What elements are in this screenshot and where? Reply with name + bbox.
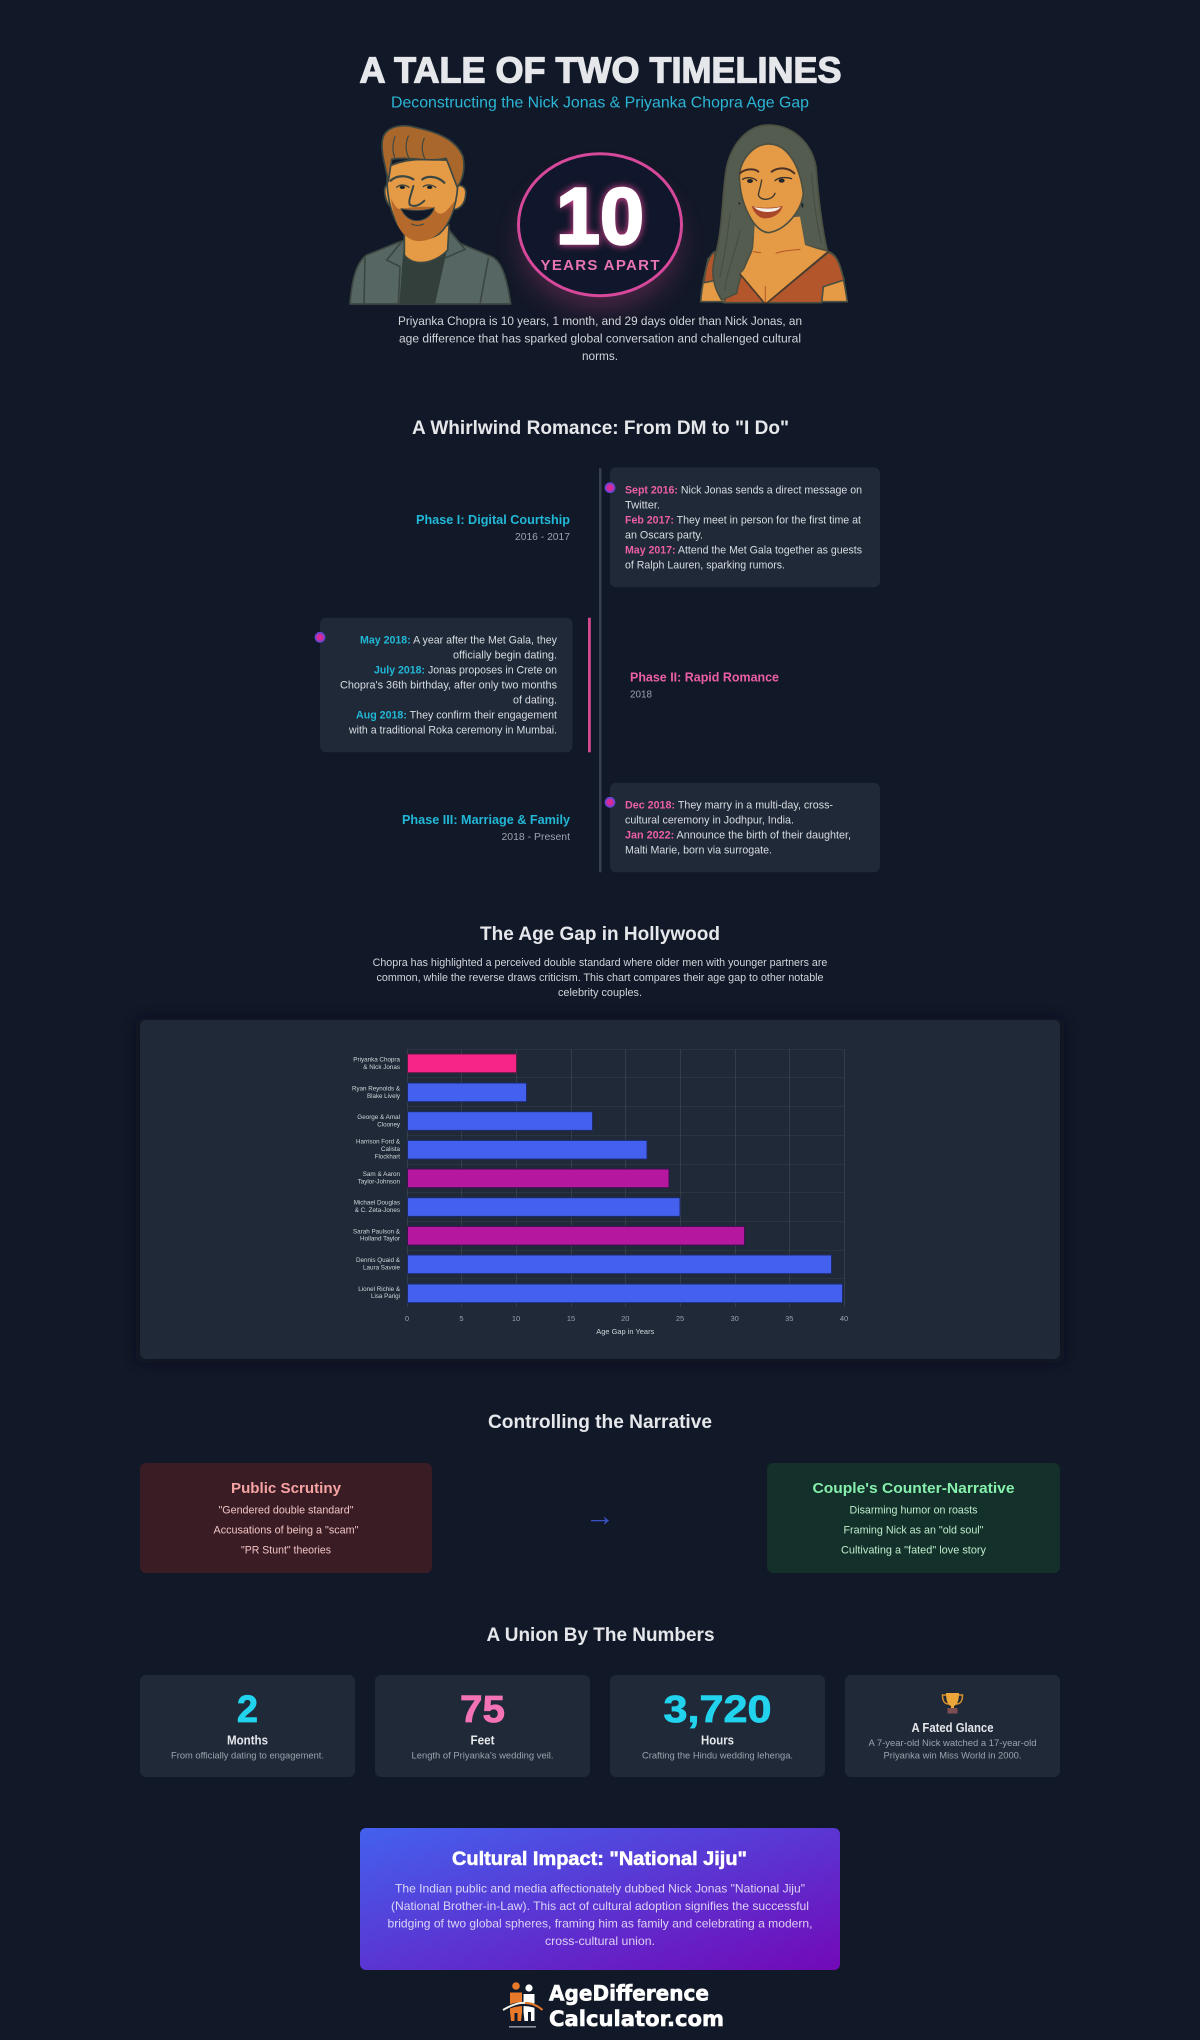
panel: public scrutiny <box>140 1463 432 1573</box>
chart axis ticks: 35 <box>785 1314 793 1323</box>
stat card: feet <box>375 1675 590 1777</box>
phase I label <box>416 512 570 543</box>
timeline spine <box>599 468 602 872</box>
panel: public scrutiny: "Gendered double standard" <box>218 1504 354 1516</box>
chart category labels: Harrison Ford & <box>356 1139 400 1146</box>
phase I card: Sept 2016: Nick Jonas sends a direct message on <box>625 485 862 497</box>
phase I card: May 2017: Attend the Met Gala together as guests <box>625 545 862 557</box>
chart category labels: Taylor-Johnson <box>358 1178 400 1185</box>
phase II card: Chopra's 36th birthday, after only two months <box>340 680 557 692</box>
phase II card: May 2018: A year after the Met Gala, they <box>360 635 557 647</box>
years apart label: YEARS APART <box>540 257 660 274</box>
stat card: fated glance: Priyanka win Miss World in 2000. <box>884 1751 1022 1761</box>
panel: public scrutiny: "PR Stunt" theories <box>241 1544 331 1556</box>
phase III label: Phase III: Marriage & Family <box>402 812 571 827</box>
chart category labels: Michael Douglas <box>354 1200 401 1207</box>
phase II card: officially begin dating. <box>453 650 557 662</box>
chart category labels: Calista <box>381 1146 400 1153</box>
chart axis ticks: 25 <box>676 1314 684 1323</box>
phase II card: July 2018: Jonas proposes in Crete on <box>374 665 557 677</box>
age gap badge <box>518 154 682 308</box>
panel: counter narrative: Couple's Counter-Narrative <box>812 1481 1014 1497</box>
panel: cultural impact: bridging of two global spheres, framing him as family and celebrating a modern, <box>388 1916 812 1930</box>
phase III card: Jan 2022: Announce the birth of their daughter, <box>625 830 851 842</box>
chart axis ticks: 15 <box>567 1314 575 1323</box>
panel: counter narrative <box>767 1463 1060 1573</box>
subtitle: Deconstructing the Nick Jonas & Priyanka Chopra Age Gap <box>391 94 809 111</box>
stat card: fated glance: A Fated Glance <box>912 1721 994 1735</box>
logo: Calculator.com <box>549 2007 724 2031</box>
chart category labels: Lionel Richie & <box>358 1286 401 1293</box>
stat card: hours <box>610 1675 825 1777</box>
timeline dot <box>316 633 324 642</box>
phase II label: 2018 <box>630 689 652 701</box>
phase III label <box>402 812 571 843</box>
chart axis title: Age Gap in Years <box>596 1327 655 1336</box>
phase III card: cultural ceremony in Jodhpur, India. <box>625 815 794 827</box>
chart category labels: Clooney <box>377 1122 401 1128</box>
logo <box>503 1982 724 2031</box>
chart axis ticks: 0 <box>405 1314 409 1323</box>
heading: narrative: Controlling the Narrative <box>488 1411 712 1433</box>
phase II card: with a traditional Roka ceremony in Mumbai. <box>348 725 557 737</box>
chart category labels: & Nick Jonas <box>363 1064 401 1071</box>
stat card: months: Months <box>227 1734 268 1748</box>
chart category labels: Laura Savoie <box>363 1264 400 1271</box>
panel: public scrutiny: Accusations of being a "scam" <box>214 1524 359 1536</box>
phase I card: an Oscars party. <box>625 530 703 542</box>
intro paragraph: Priyanka Chopra is 10 years, 1 month, and 29 days older than Nick Jonas, an <box>398 314 802 328</box>
phase II label: Phase II: Rapid Romance <box>630 670 779 685</box>
phase I card <box>606 467 880 587</box>
stat card: months: From officially dating to engagement. <box>171 1751 324 1761</box>
heading: age gap: The Age Gap in Hollywood <box>480 923 720 945</box>
phase III label: 2018 - Present <box>502 831 570 843</box>
stat card: hours: 3,720 <box>664 1689 772 1731</box>
chart category labels: & C. Zeta-Jones <box>355 1207 401 1214</box>
panel: cultural impact: The Indian public and media affectionately dubbed Nick Jonas "National Jiju" <box>395 1881 805 1895</box>
chart category labels: Sam & Aaron <box>363 1171 400 1178</box>
intro paragraph <box>398 314 802 363</box>
phase II card: of dating. <box>513 695 557 707</box>
stat card: fated glance: A 7-year-old Nick watched a 17-year-old <box>868 1738 1036 1748</box>
icon: two figures <box>503 1982 542 2028</box>
chart axis ticks: 30 <box>731 1314 739 1323</box>
panel: public scrutiny: Public Scrutiny <box>231 1481 341 1497</box>
chart category labels: Priyanka Chopra <box>353 1057 400 1064</box>
heading: numbers: A Union By The Numbers <box>486 1624 715 1646</box>
phase I card: Feb 2017: They meet in person for the first time at <box>625 515 862 527</box>
title: A TALE OF TWO TIMELINES <box>360 49 842 90</box>
phase I label: 2016 - 2017 <box>515 531 570 543</box>
panel: counter narrative: Cultivating a "fated" love story <box>841 1544 986 1556</box>
panel: cultural impact: (National Brother-in-Law). This act of cultural adoption signifies the successful <box>391 1899 809 1913</box>
chart axis ticks: 5 <box>459 1314 464 1323</box>
chart category labels: George & Amal <box>357 1114 400 1121</box>
chart axis ticks: 40 <box>840 1314 848 1323</box>
bar chart grid <box>407 1049 844 1307</box>
stat card: months: 2 <box>237 1689 258 1731</box>
illustration: Priyanka Chopra <box>701 125 847 303</box>
logo: AgeDifference <box>549 1982 709 2006</box>
chart bars <box>408 1054 842 1303</box>
intro paragraph: norms. <box>582 349 618 363</box>
timeline dot <box>606 798 614 807</box>
chart category labels: Dennis Quaid & <box>356 1257 401 1264</box>
chart axis ticks: 10 <box>512 1314 520 1323</box>
stat card: feet: Feet <box>470 1734 495 1748</box>
chart intro paragraph: common, while the reverse draws criticism. This chart compares their age gap to other notable <box>376 972 824 984</box>
phase I label: Phase I: Digital Courtship <box>416 512 570 527</box>
phase II label <box>630 670 779 701</box>
chart category labels: Holland Taylor <box>360 1236 401 1243</box>
panel: counter narrative: Framing Nick as an "old soul" <box>844 1524 984 1536</box>
timeline dot <box>606 483 614 492</box>
panel: counter narrative: Disarming humor on roasts <box>850 1504 978 1516</box>
chart category labels: Lisa Parigi <box>371 1293 400 1300</box>
phase III card: Dec 2018: They marry in a multi-day, cross- <box>625 800 833 812</box>
chart axis ticks: 20 <box>621 1314 629 1323</box>
phase III card: Malti Marie, born via surrogate. <box>625 845 772 857</box>
big number 10: 10 <box>556 171 644 260</box>
phase II card <box>316 618 591 752</box>
chart category labels <box>352 1057 401 1300</box>
phase I card: of Ralph Lauren, sparking rumors. <box>625 560 785 572</box>
stat card: feet: Length of Priyanka's wedding veil. <box>412 1751 554 1761</box>
phase II card: Aug 2018: They confirm their engagement <box>356 710 558 722</box>
chart intro paragraph: Chopra has highlighted a perceived double standard where older men with younger partners are <box>373 957 827 969</box>
stat card: feet: 75 <box>460 1689 505 1731</box>
panel: bar chart card <box>136 1018 1064 1363</box>
panel: cultural impact <box>360 1828 840 1970</box>
chart category labels: Sarah Paulson & <box>353 1228 400 1235</box>
chart axis ticks <box>405 1314 848 1323</box>
heading: timeline: A Whirlwind Romance: From DM to "I Do" <box>412 417 789 439</box>
panel: cultural impact: Cultural Impact: "National Jiju" <box>452 1849 747 1870</box>
stat card: hours: Hours <box>701 1734 734 1748</box>
arrow: → <box>585 1500 615 1532</box>
stat card: months <box>140 1675 355 1777</box>
illustration: Nick Jonas <box>350 126 511 304</box>
phase III card <box>606 783 880 872</box>
icon: trophy <box>942 1693 962 1714</box>
chart category labels: Ryan Reynolds & <box>352 1086 400 1092</box>
stat card: fated glance <box>845 1675 1060 1777</box>
phase I card: Twitter. <box>625 500 660 512</box>
chart intro paragraph <box>373 957 827 999</box>
chart category labels: Blake Lively <box>367 1093 401 1100</box>
stat card: hours: Crafting the Hindu wedding lehenga. <box>642 1751 793 1761</box>
intro paragraph: age difference that has sparked global conversation and challenged cultural <box>399 331 801 345</box>
chart category labels: Flockhart <box>375 1154 400 1160</box>
chart intro paragraph: celebrity couples. <box>558 987 642 999</box>
panel: cultural impact: cross-cultural union. <box>545 1934 655 1948</box>
